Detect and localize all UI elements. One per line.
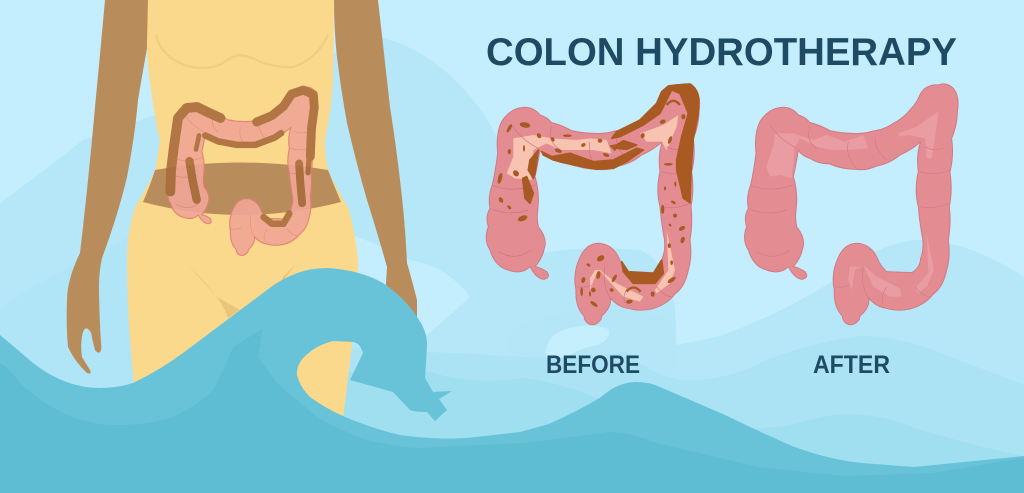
groin creases: [188, 265, 295, 318]
brown deposits: [170, 90, 314, 224]
left arm: [67, 0, 149, 374]
waistband skin: [143, 162, 341, 215]
label: before: BEFORE: [546, 351, 640, 379]
small colon on the body: [168, 87, 317, 255]
wave shadow: [0, 328, 1024, 493]
label: after: AFTER: [813, 351, 890, 379]
right arm: [334, 0, 417, 340]
wave: [0, 268, 1024, 493]
body: [127, 0, 358, 420]
title: COLON HYDROTHERAPY: [486, 31, 957, 74]
figure: woman's torso: [67, 0, 417, 420]
chest line: [156, 35, 328, 68]
impacted waste and lumen: [490, 84, 699, 308]
colon after treatment: [745, 84, 958, 325]
wave crest: [0, 268, 1024, 493]
colon before treatment: [486, 84, 700, 325]
